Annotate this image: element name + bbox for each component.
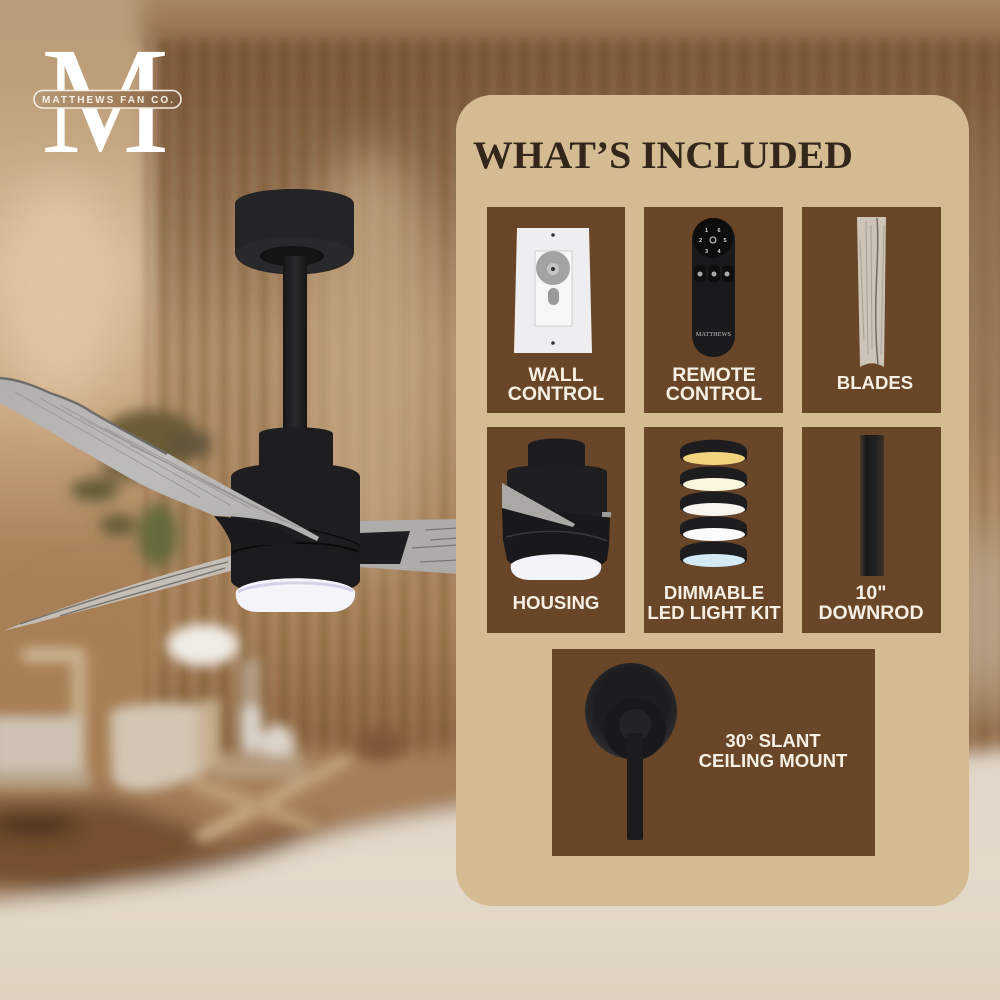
label: CEILING MOUNT: [699, 750, 848, 771]
tile: remote control: [644, 207, 783, 413]
LED light: [236, 578, 355, 612]
icon: LED stack: [680, 440, 747, 567]
icon: wall control: [514, 228, 592, 353]
logo monogram M: M: [41, 17, 169, 186]
icon: remote: 5: [723, 238, 727, 244]
floor: [0, 745, 1000, 1000]
label: DOWNROD: [818, 602, 924, 624]
label: 10": [856, 582, 886, 604]
icon: blade: [857, 217, 886, 367]
icon: remote: MATTHEWS: [696, 331, 732, 338]
tile: slant ceiling mount: [552, 649, 875, 856]
icon: slant mount: [585, 663, 677, 840]
label: HOUSING: [513, 592, 599, 613]
logo wordmark: MATTHEWS FAN CO.: [42, 95, 173, 106]
label: CONTROL: [508, 383, 604, 405]
logo: Matthews Fan Co.: [34, 17, 181, 186]
label: BLADES: [837, 372, 913, 393]
icon: remote: 3: [705, 249, 708, 255]
label: DIMMABLE: [664, 582, 764, 603]
tile: dimmable LED light kit: [644, 427, 783, 633]
motor housing: [231, 427, 360, 595]
fan blade: lower left: [3, 555, 234, 631]
label: WALL: [528, 364, 584, 386]
icon: downrod: [860, 435, 884, 576]
icon: remote: [692, 218, 735, 357]
tile: blades: [802, 207, 941, 413]
heading: WHAT’S INCLUDED: [473, 134, 853, 177]
label: REMOTE: [672, 364, 756, 386]
downrod: [283, 256, 307, 432]
label: LED LIGHT KIT: [647, 602, 781, 623]
logo pill: [34, 90, 181, 108]
icon: remote: 1: [705, 228, 708, 234]
label: CONTROL: [666, 383, 762, 405]
blade iron: [214, 516, 300, 550]
fan blade: right: [353, 519, 458, 574]
blade iron right: [360, 531, 410, 564]
label: 30° SLANT: [725, 730, 821, 751]
blurred plant: [71, 410, 212, 567]
ceiling fan: [0, 189, 458, 631]
icon: remote: 6: [717, 228, 721, 234]
fan blade: upper left: [0, 377, 319, 541]
tile: wall control: [487, 207, 625, 413]
icon: housing: [502, 438, 611, 580]
ceiling canopy: [235, 189, 354, 274]
tile: housing: [487, 427, 625, 633]
tile: downrod: [802, 427, 941, 633]
icon: remote: 4: [717, 249, 721, 255]
blurred furniture: [0, 624, 352, 843]
icon: remote: 2: [699, 238, 702, 244]
panel: what's included: [456, 95, 969, 906]
